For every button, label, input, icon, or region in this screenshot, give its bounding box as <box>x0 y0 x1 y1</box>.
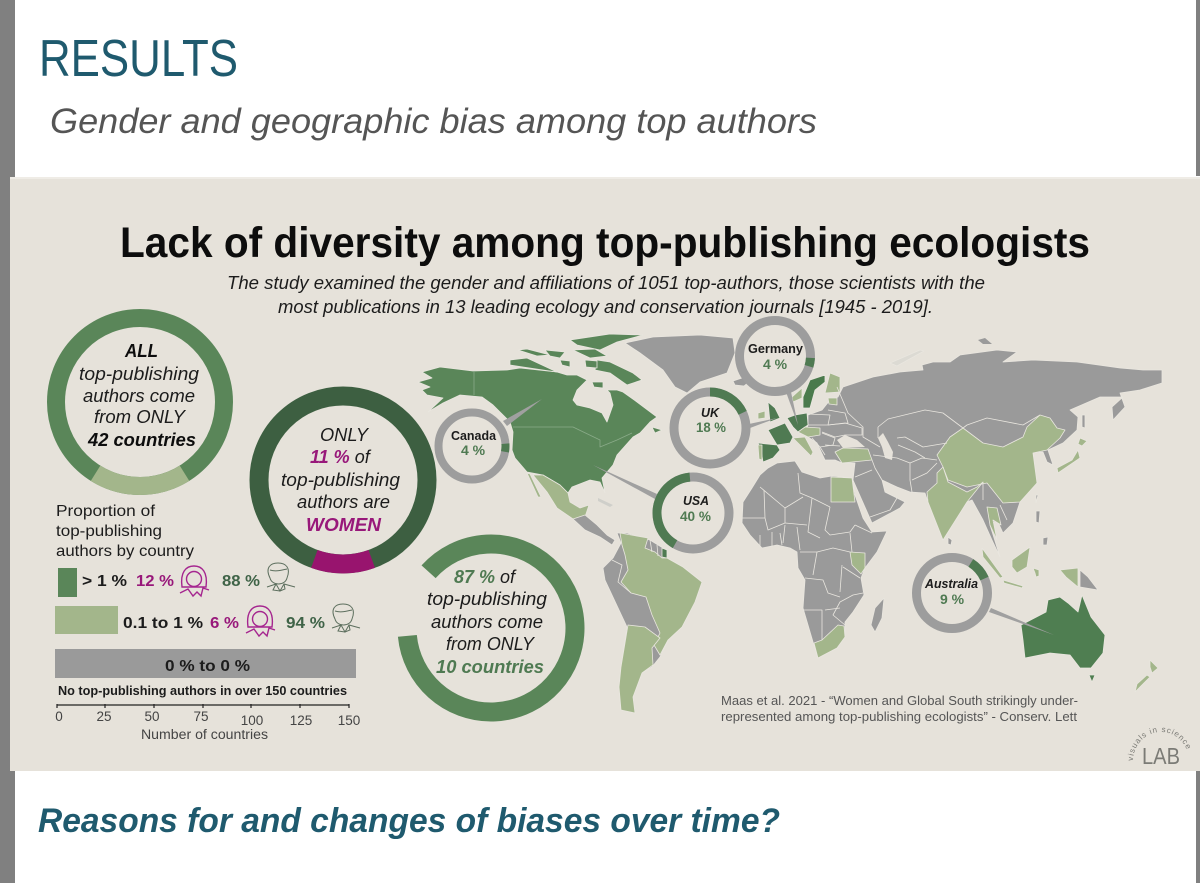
no authors note: No top-publishing authors in over 150 countries <box>58 684 347 698</box>
legend row: more than 1 percent: 88 % <box>222 573 260 590</box>
legend row: 0.1 to 1 percent <box>55 604 360 636</box>
logo: visuals in science lab: visuals in science <box>1128 728 1190 761</box>
legend row: more than 1 percent: 12 % <box>136 573 174 590</box>
map: france <box>768 423 793 445</box>
legend heading: Proportion of <box>56 503 156 520</box>
study description: most publications in 13 leading ecology and conservation journals [1945 - 2019]. <box>278 297 933 317</box>
country ring: australia: 9 % <box>940 591 965 607</box>
infographic title: Lack of diversity among top-publishing ecologists <box>120 219 1090 267</box>
ring: all authors 42 countries: authors come <box>83 386 195 406</box>
ring: only 11 percent women: authors are <box>297 492 390 512</box>
pointer: canada <box>503 399 542 426</box>
legend row: more than 1 percent: > 1 % <box>82 573 127 590</box>
country ring: germany: Germany <box>748 341 804 356</box>
country ring: usa: USA <box>683 493 709 508</box>
pointer: australia <box>989 608 1054 635</box>
legend heading <box>56 503 194 560</box>
legend row: more than 1 percent <box>58 563 295 597</box>
map: thailand <box>987 507 1001 540</box>
map: australia <box>1021 595 1105 682</box>
ring: 87 percent from 10 countries: top-publishing <box>427 589 547 609</box>
ring: only 11 percent women: 11 % of <box>310 447 372 467</box>
citation: represented among top-publishing ecologists” - Conserv. Lett <box>721 709 1077 724</box>
slide subtitle: Gender and geographic bias among top authors <box>50 102 817 141</box>
map: africa <box>742 461 887 658</box>
icon: woman <box>180 566 209 596</box>
country ring: uk: UK <box>701 405 721 420</box>
panel: infographic <box>10 177 1200 771</box>
map: caspian sea <box>878 433 893 460</box>
country ring: australia <box>903 544 1001 642</box>
axis: number of countries: 25 <box>96 709 112 724</box>
country ring: germany: 4 % <box>763 356 788 372</box>
map: finland <box>825 373 840 393</box>
map: north america <box>418 334 662 493</box>
country ring: germany <box>738 319 812 393</box>
country ring: uk: 18 % <box>696 419 727 435</box>
map: asian islands <box>890 338 1098 590</box>
map: iceland <box>733 378 750 386</box>
map: central america <box>573 515 615 545</box>
axis: number of countries: 50 <box>144 709 160 724</box>
axis: number of countries <box>55 704 360 742</box>
map: ireland <box>758 411 765 419</box>
axis: number of countries: 0 <box>55 709 63 724</box>
icon: man <box>267 563 295 591</box>
ring: all authors 42 countries: 42 countries <box>87 430 196 450</box>
country ring: canada <box>436 410 508 482</box>
pointer: usa <box>593 465 657 499</box>
country ring: usa <box>644 464 742 562</box>
ring: 87 percent from 10 countries: 87 % of <box>454 567 517 587</box>
axis: number of countries: 100 <box>241 713 263 728</box>
country ring: canada: 4 % <box>461 442 486 458</box>
map: estonia <box>828 398 837 405</box>
map: greenland <box>625 335 735 393</box>
country ring: canada: Canada <box>451 428 497 443</box>
map: sweden <box>803 375 825 408</box>
pointer: germany <box>786 392 798 425</box>
ring: only 11 percent women <box>235 372 451 588</box>
legend bar: zero percent: 0 % to 0 % <box>165 658 250 675</box>
map: eurasia <box>758 350 1162 557</box>
ring: 87 percent from 10 countries: authors come <box>431 612 543 632</box>
map: uk <box>768 402 780 422</box>
map: south america <box>603 533 702 713</box>
country ring: uk <box>674 392 746 464</box>
ring: 87 percent from 10 countries: from ONLY <box>446 634 536 654</box>
map: mexico <box>533 475 589 519</box>
axis: number of countries: 125 <box>290 713 312 728</box>
legend row: 0.1 to 1 percent: 94 % <box>286 615 325 632</box>
ring: 87 percent from 10 countries <box>372 509 610 747</box>
study description: The study examined the gender and affiliations of 1051 top-authors, those scientists with the <box>227 273 985 293</box>
axis: number of countries: Number of countries <box>141 727 268 742</box>
map: border details <box>474 371 632 447</box>
map: germany <box>787 413 808 432</box>
legend heading: top-publishing <box>56 523 162 540</box>
legend row: 0.1 to 1 percent: 0.1 to 1 % <box>123 615 203 632</box>
map: new zealand <box>1135 660 1158 692</box>
citation: Maas et al. 2021 - “Women and Global South strikingly under- <box>721 693 1078 708</box>
study description <box>227 273 985 317</box>
ring: all authors 42 countries: top-publishing <box>79 364 199 384</box>
legend bar: zero percent <box>55 649 356 678</box>
map: norway <box>792 388 802 402</box>
logo: visuals in science lab: LAB <box>1142 743 1180 769</box>
citation <box>721 693 1078 724</box>
ring: 87 percent from 10 countries: 10 countries <box>436 657 544 677</box>
ring: only 11 percent women: ONLY <box>320 425 370 445</box>
axis: number of countries: 150 <box>338 713 360 728</box>
map: turkey <box>835 448 872 463</box>
closing question: Reasons for and changes of biases over time? <box>38 802 780 840</box>
ring: all authors 42 countries <box>24 286 256 518</box>
ring: only 11 percent women: WOMEN <box>306 515 382 535</box>
legend heading: authors by country <box>56 543 194 560</box>
ring: only 11 percent women: top-publishing <box>281 470 400 490</box>
map: black sea <box>837 435 865 448</box>
ring: all authors 42 countries: from ONLY <box>94 407 187 427</box>
legend <box>55 503 360 742</box>
map: spain <box>758 443 780 462</box>
legend row: 0.1 to 1 percent: 6 % <box>210 615 239 632</box>
slide title: RESULTS <box>39 30 238 88</box>
map: india <box>927 467 983 540</box>
pointer: uk <box>749 418 777 428</box>
ring: all authors 42 countries: ALL <box>124 341 158 361</box>
country ring: australia: Australia <box>924 576 978 591</box>
map: central europe <box>798 427 820 437</box>
country ring: usa: 40 % <box>680 508 712 524</box>
icon: woman <box>246 606 275 636</box>
map: italy <box>793 437 813 456</box>
map: portugal <box>758 445 762 460</box>
world map <box>418 334 1162 713</box>
icon: man <box>332 604 360 632</box>
axis: number of countries: 75 <box>193 709 209 724</box>
map: china <box>937 415 1065 503</box>
